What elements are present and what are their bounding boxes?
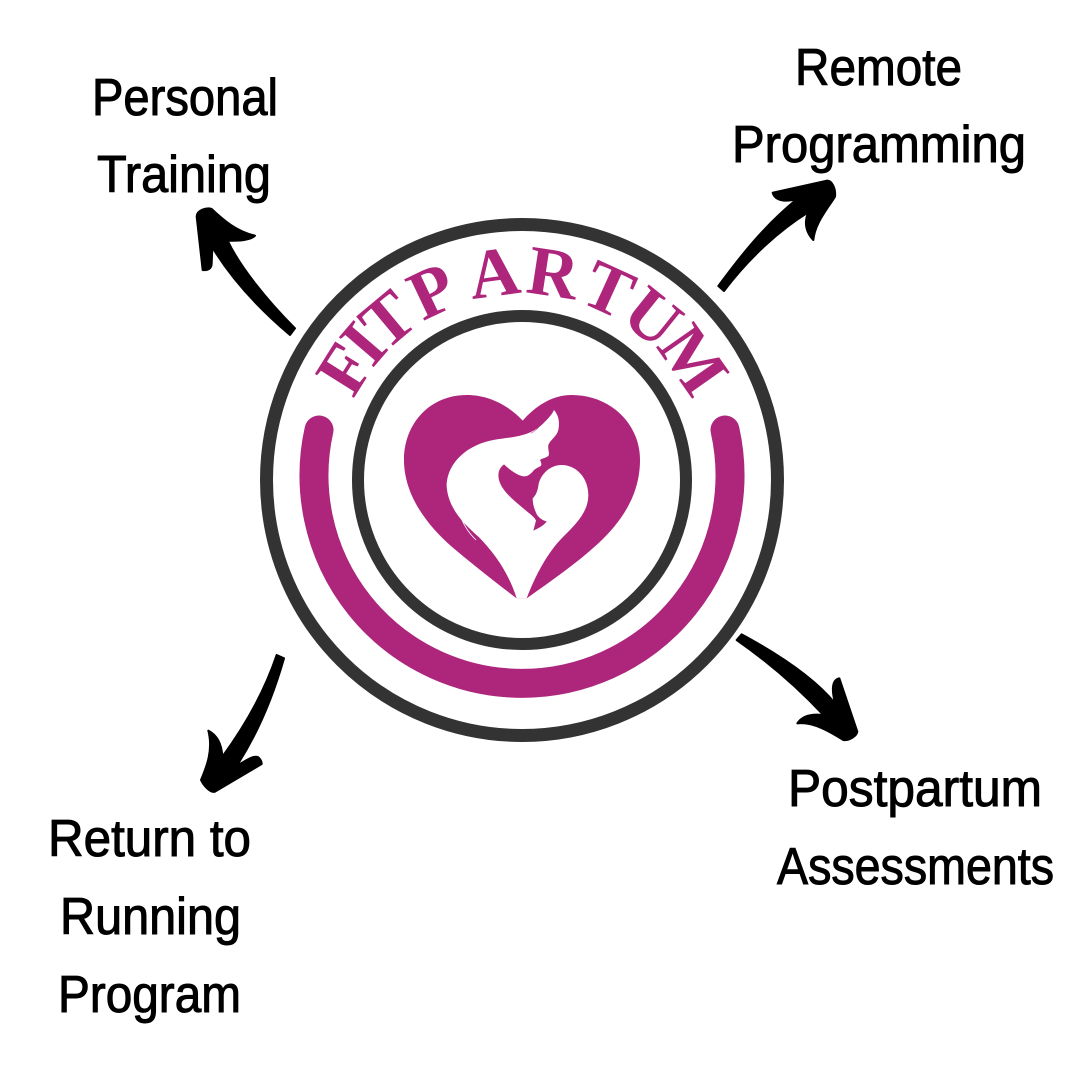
inner ring (358, 316, 686, 644)
pink arc (314, 430, 730, 683)
label: Remote Programming (732, 39, 1026, 174)
label: Return to Running Program (48, 810, 251, 1024)
label: Personal Training (92, 69, 278, 204)
label: Return to Running Program: Program (58, 966, 241, 1024)
arrow: to Postpartum Assessments (737, 634, 857, 740)
arrow: to Personal Training (197, 209, 295, 335)
outer ring (266, 224, 778, 736)
logo badge (266, 224, 778, 736)
label: Return to Running Program: Return to (48, 810, 251, 868)
arrow: to Return to Running Program (201, 655, 284, 792)
label: Personal Training: Personal (92, 69, 278, 127)
label: Postpartum Assessments (777, 760, 1054, 896)
wordmark: FITPARTUM: FITPARTUM (301, 232, 743, 410)
label: Postpartum Assessments: Assessments (777, 838, 1054, 896)
label: Return to Running Program: Running (60, 888, 241, 946)
label: Remote Programming: Remote (795, 39, 962, 97)
icon: mother and baby heart (404, 395, 640, 598)
label: Personal Training: Training (97, 146, 271, 204)
label: Remote Programming: Programming (732, 116, 1026, 174)
arrow: to Remote Programming (718, 181, 835, 291)
label: Postpartum Assessments: Postpartum (788, 760, 1042, 818)
